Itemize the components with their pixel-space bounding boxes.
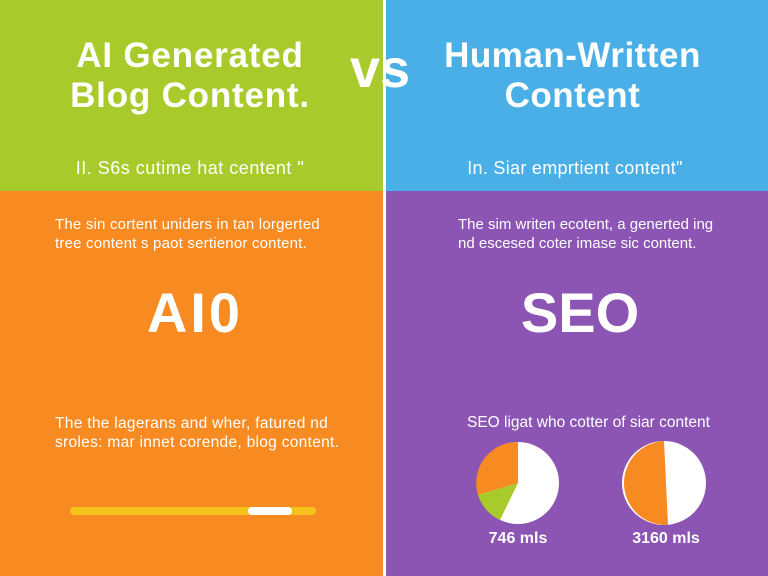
title: AI [70, 36, 310, 115]
text left lower: sroles: mar innet corende, blog content. [55, 434, 339, 451]
text left lower: The the lagerans and wher, fatured nd [55, 415, 328, 432]
pie left [476, 442, 559, 524]
text left lower [55, 415, 339, 451]
text left: The sin cortent uniders in tan lorgerted [55, 216, 320, 233]
title: human [444, 36, 701, 115]
title: vs: vs [350, 39, 410, 99]
progress bar [70, 507, 316, 515]
heading AIO: AI0 [147, 281, 243, 344]
subtitle right: In. Siar emprtient content" [467, 158, 683, 178]
pie labels: 3160 mls [632, 530, 700, 547]
panel: human bottom [386, 191, 768, 576]
title: human: Human-Written [444, 36, 701, 75]
panel: AI top [0, 0, 383, 191]
pie right [622, 441, 706, 525]
heading SEO: SEO [521, 281, 639, 344]
title: human: Content [505, 76, 640, 115]
pie charts [476, 441, 706, 547]
pie labels [489, 530, 700, 547]
panel: AI bottom [0, 191, 383, 576]
pie labels: 746 mls [489, 530, 547, 547]
text right: The sim writen ecotent, a generted ing [458, 216, 713, 233]
subtitle left: II. S6s cutime hat centent " [76, 158, 304, 178]
text left: tree content s paot sertienor content. [55, 235, 307, 252]
title: AI: Blog Content. [70, 76, 310, 115]
panel: human top [386, 0, 768, 191]
text left [55, 216, 320, 252]
text right [458, 216, 713, 252]
text right: nd escesed coter imase sic content. [458, 235, 696, 252]
title: AI: AI Generated [76, 36, 304, 75]
text right lower: SEO ligat who cotter of siar content [467, 414, 710, 431]
